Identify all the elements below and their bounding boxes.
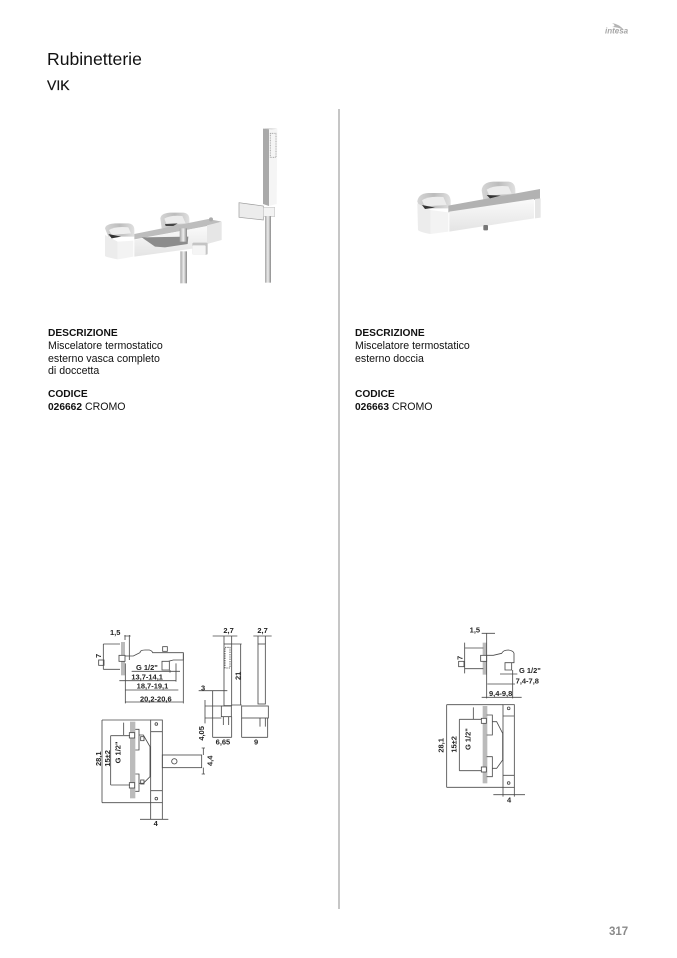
front view <box>102 720 205 819</box>
description: right product: esterno doccia <box>355 353 424 365</box>
description: right product: DESCRIZIONE <box>355 328 425 339</box>
subtitle: VIK <box>47 77 70 93</box>
front dimension labels: 4,4 <box>206 755 215 766</box>
front dimension labels: G 1/2" <box>114 741 123 763</box>
description: left product: Miscelatore termostatico <box>48 340 163 352</box>
side dimension labels: 7,4-7,8 <box>516 677 539 686</box>
code: left product <box>48 389 126 413</box>
description: left product: esterno vasca completo <box>48 353 160 365</box>
code: right product: 026663 CROMO <box>355 401 433 413</box>
hand shower labels: 3 <box>201 683 205 692</box>
hand shower labels: 6,65 <box>216 738 230 747</box>
side dimension labels <box>94 628 172 703</box>
side dimension labels: 7 <box>455 656 464 660</box>
code: right product <box>355 389 433 413</box>
hand shower labels: 9 <box>254 738 258 747</box>
code: left product: 026662 CROMO <box>48 401 126 413</box>
side dimension labels: 9,4-9,8 <box>489 689 512 698</box>
front dimension labels: 4 <box>507 795 512 804</box>
front view <box>447 705 525 797</box>
diagram: shower mixer dimensions <box>436 625 541 804</box>
side dimension labels <box>455 625 541 698</box>
front dimension labels <box>436 728 512 804</box>
side dimension labels: 1,5 <box>470 625 480 634</box>
title: Rubinetterie <box>47 49 142 69</box>
photo: shower mixer <box>417 182 541 234</box>
front dimension labels: 15±2 <box>450 736 459 753</box>
hand shower labels: 2,7 <box>257 626 268 635</box>
hand shower labels: 4,05 <box>197 726 206 741</box>
logo: intesa: intesa <box>605 26 629 36</box>
side dimension labels: G 1/2" <box>136 663 158 672</box>
front dimension labels: G 1/2" <box>464 728 473 750</box>
code: left product: CODICE <box>48 389 88 400</box>
code: right product: CODICE <box>355 389 395 400</box>
hand shower labels <box>197 626 268 747</box>
description: left product <box>48 328 163 377</box>
side dimension labels: 7 <box>94 654 103 658</box>
photo: bath mixer with hand shower <box>105 128 277 283</box>
hand shower views <box>199 636 272 737</box>
description: left product: di doccetta <box>48 365 99 377</box>
side view <box>459 633 522 698</box>
page number: 317 <box>609 926 628 938</box>
side dimension labels: G 1/2" <box>519 666 541 675</box>
side dimension labels: 1,5 <box>110 628 120 637</box>
side dimension labels: 13,7-14,1 <box>131 672 163 681</box>
hand shower labels: 21 <box>234 672 243 680</box>
description: right product <box>355 328 470 365</box>
side dimension labels: 18,7-19,1 <box>137 682 168 691</box>
front dimension labels: 15±2 <box>103 750 112 767</box>
description: right product: Miscelatore termostatico <box>355 340 470 352</box>
description: left product: DESCRIZIONE <box>48 328 118 339</box>
side dimension labels: 20,2-20,6 <box>140 694 172 703</box>
center divider <box>338 109 340 909</box>
front dimension labels: 28,1 <box>436 738 445 753</box>
front dimension labels: 4 <box>154 819 159 828</box>
hand shower labels: 2,7 <box>223 626 234 635</box>
front dimension labels: 28,1 <box>94 751 103 766</box>
side view <box>99 635 183 703</box>
diagram: bath mixer dimensions <box>94 626 272 828</box>
front dimension labels <box>94 741 215 828</box>
